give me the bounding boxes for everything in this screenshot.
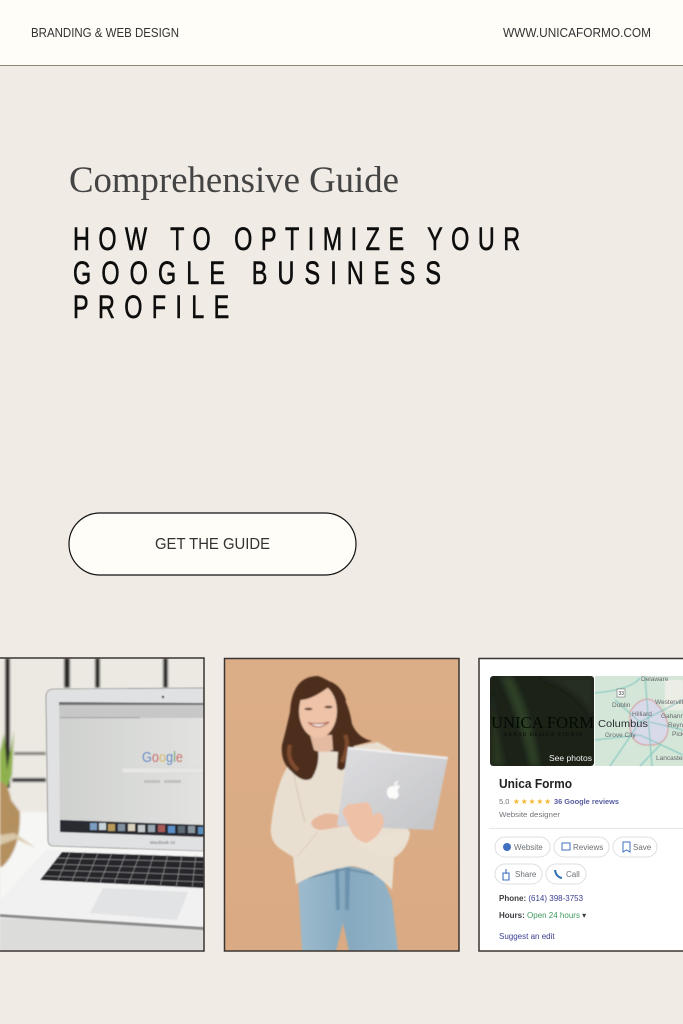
table [0, 812, 204, 922]
dock [60, 820, 204, 837]
business photo: UNICA FORM [491, 713, 594, 732]
rating: ★★★★★ [513, 797, 551, 806]
screenshot: Google business panel [479, 658, 683, 951]
button: get the guide: GET THE GUIDE [155, 536, 270, 553]
header left label: BRANDING & WEB DESIGN [31, 25, 179, 40]
window frame [5, 658, 168, 788]
jeans [298, 866, 398, 951]
category: Website designer [499, 810, 561, 819]
business photo: BRAND DESIGN STUDIO [504, 733, 582, 738]
photo: laptop showing Google [0, 658, 204, 951]
action buttons: Website [514, 843, 543, 852]
photo: woman holding laptop [224, 658, 459, 951]
sweater [271, 742, 410, 890]
laptop base [0, 850, 204, 927]
map [595, 676, 683, 766]
neck [310, 735, 333, 752]
rating: 5.0 [499, 797, 509, 806]
main heading [73, 220, 520, 325]
map: Hilliard [632, 711, 652, 718]
hours: Hours: Open 24 hours ▾ [499, 911, 586, 920]
trackpad [90, 888, 188, 920]
plant [0, 730, 14, 795]
map: 33 [618, 691, 624, 697]
main heading: HOW TO OPTIMIZE YOUR [73, 220, 520, 257]
laptop [337, 747, 448, 830]
laptop lid [46, 688, 204, 851]
header right label: WWW.UNICAFORMO.COM [503, 25, 651, 40]
search box [122, 768, 172, 772]
subtitle: Comprehensive Guide [69, 160, 399, 201]
hand under laptop [311, 814, 346, 830]
business name: Unica Formo [499, 777, 572, 791]
main heading: GOOGLE BUSINESS [73, 254, 441, 291]
map: Dublin [612, 702, 631, 709]
map: Grove City [605, 732, 636, 739]
action buttons: Reviews [573, 843, 603, 852]
screen [59, 716, 204, 824]
map: Delaware [641, 676, 669, 683]
action buttons [495, 837, 657, 884]
action buttons: Save [633, 843, 652, 852]
header bar [0, 0, 683, 66]
right sleeve [360, 832, 410, 856]
button: get the guide [69, 513, 356, 575]
phone: Phone: (614) 398-3753 [499, 894, 584, 903]
photo: laptop showing Google: MacBook Air [150, 840, 176, 845]
rating [499, 798, 619, 806]
map: Columbus [598, 718, 648, 730]
face [299, 684, 337, 738]
keyboard [40, 852, 204, 888]
action buttons: Share [515, 870, 537, 879]
hair [282, 676, 372, 780]
main heading: PROFILE [73, 288, 229, 325]
hand on laptop [342, 802, 384, 843]
apple logo [387, 781, 400, 799]
rating: 36 Google reviews [554, 797, 619, 806]
business photo [490, 676, 594, 766]
google logo: Google [142, 750, 183, 766]
suggest an edit: Suggest an edit [499, 932, 555, 941]
business photo: See photos [549, 753, 592, 763]
action buttons: Call [566, 870, 580, 879]
